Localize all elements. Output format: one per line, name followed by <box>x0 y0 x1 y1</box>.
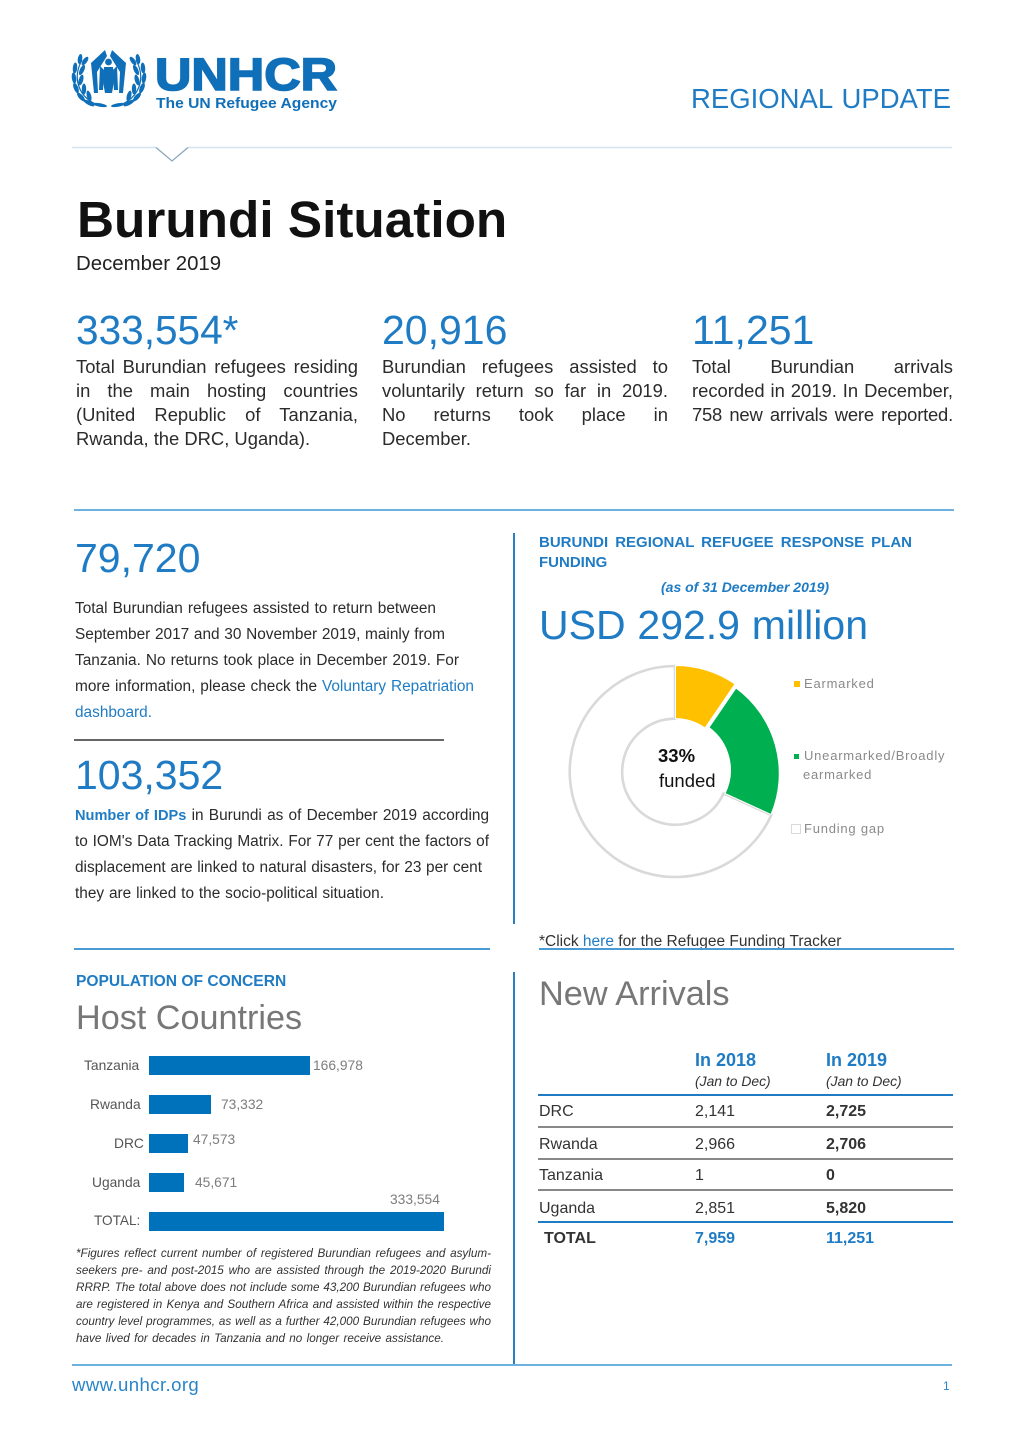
arrivals table: (Jan to Dec) <box>826 1073 902 1089</box>
arrivals table: Rwanda <box>539 1136 598 1153</box>
footnote: country level programmes, as well as a further 42,000 Burundian refugees who <box>76 1315 491 1328</box>
bar chart: host countries: 73,332 <box>221 1097 263 1112</box>
funding gap segment <box>570 666 771 877</box>
description: Total Burundian refugees residing <box>76 356 358 377</box>
footnote: have lived for decades in Tanzania and no longer receive assistance. <box>76 1332 444 1345</box>
number: 103,352 <box>75 752 223 798</box>
description: Total Burundian refugees assisted to return between <box>75 600 436 617</box>
bar chart: host countries: 166,978 <box>313 1058 363 1073</box>
donut center label: 33% <box>658 745 695 766</box>
footnote: are registered in Kenya and Southern Africa and assisted within the respective <box>76 1298 491 1311</box>
legend: earmarked: Earmarked <box>804 676 875 691</box>
footnote: *Figures reflect current number of registered Burundian refugees and asylum- <box>76 1247 491 1260</box>
icon: laurel and sheltering hands emblem <box>71 50 147 108</box>
date: December 2019 <box>76 253 221 275</box>
unearmarked segment <box>709 688 779 814</box>
bar chart: host countries: 45,671 <box>195 1175 237 1190</box>
legend: unearmarked: earmarked <box>803 767 872 782</box>
description: displacement are linked to natural disasters, for 23 per cent <box>75 859 482 876</box>
description: (United Republic of Tanzania, <box>76 404 358 425</box>
legend: funding gap: Funding gap <box>804 821 885 836</box>
page number: 1 <box>943 1379 950 1393</box>
arrivals table: 7,959 <box>695 1230 735 1247</box>
description: more information, please check the Voluntary Repatriation <box>75 678 474 695</box>
bar chart: host countries: Rwanda <box>90 1097 141 1112</box>
description: dashboard. <box>75 704 152 721</box>
description: Tanzania. No returns took place in December 2019. For <box>75 652 459 669</box>
arrivals table: 0 <box>826 1167 835 1184</box>
section label: POPULATION OF CONCERN <box>76 973 286 990</box>
bar chart: host countries: Uganda <box>92 1175 140 1190</box>
number: 11,251 <box>692 307 814 353</box>
footnote: seekers pre- and post-2015 who are assisted through the 2019-2020 Burundi <box>76 1264 491 1277</box>
stat: returns <box>382 307 668 449</box>
section heading: Host Countries <box>76 999 302 1037</box>
arrivals table: 2,725 <box>826 1103 866 1120</box>
header label: regional update: REGIONAL UPDATE <box>691 83 951 114</box>
description: 758 new arrivals were reported. <box>692 404 953 425</box>
funding tracker note: *Click here for the Refugee Funding Tracker <box>539 932 841 950</box>
arrivals table: 2,706 <box>826 1136 866 1153</box>
logo wordmark: The UN Refugee Agency <box>156 95 338 112</box>
bar chart: host countries <box>84 1056 444 1231</box>
panel: IDPs <box>75 752 490 902</box>
funding heading: FUNDING <box>539 554 607 571</box>
logo wordmark: UNHCR <box>155 49 337 100</box>
description: No returns took place in <box>382 404 668 425</box>
footnote: RRRP. The total above does not include some 43,200 Burundian refugees who <box>76 1281 491 1294</box>
description <box>382 356 668 449</box>
funding heading: BURUNDI REGIONAL REFUGEE RESPONSE PLAN <box>539 534 912 551</box>
donut chart <box>568 664 779 878</box>
arrivals table: In 2019 <box>826 1050 887 1070</box>
description: recorded in 2019. In December, <box>692 380 953 401</box>
description: to IOM's Data Tracking Matrix. For 77 per cent the factors of <box>75 833 489 850</box>
as-of date: (as of 31 December 2019) <box>661 579 829 595</box>
description: in the main hosting countries <box>76 380 358 401</box>
arrivals table: 2,141 <box>695 1103 735 1120</box>
description <box>692 356 953 425</box>
legend: unearmarked <box>794 748 945 782</box>
number: 20,916 <box>382 307 507 353</box>
arrivals table: 1 <box>695 1167 704 1184</box>
panel: assisted returns <box>75 535 474 721</box>
arrivals table: (Jan to Dec) <box>695 1073 771 1089</box>
description: December. <box>382 428 471 449</box>
stat: arrivals <box>692 307 953 425</box>
panel: population of concern <box>76 973 302 1037</box>
description: they are linked to the socio-political situation. <box>75 885 384 902</box>
arrivals table: Tanzania <box>539 1167 603 1184</box>
description: Total Burundian arrivals <box>692 356 953 377</box>
description <box>76 356 358 449</box>
funding heading <box>539 534 912 571</box>
arrivals table: 11,251 <box>826 1230 874 1247</box>
funding total: USD 292.9 million <box>539 602 868 648</box>
arrivals table: In 2018 <box>695 1050 756 1070</box>
donut center label: funded <box>659 770 716 791</box>
stat: total refugees <box>76 307 358 449</box>
section heading: New Arrivals <box>539 975 730 1013</box>
panel: funding <box>539 534 945 950</box>
arrivals table: TOTAL <box>544 1230 596 1247</box>
description: Rwanda, the DRC, Uganda). <box>76 428 310 449</box>
arrivals table: 5,820 <box>826 1200 866 1217</box>
arrivals table: DRC <box>539 1103 574 1120</box>
number: 79,720 <box>75 535 200 581</box>
title: Burundi Situation <box>77 191 507 248</box>
arrivals table: 2,851 <box>695 1200 735 1217</box>
bar chart: host countries: 333,554 <box>390 1192 440 1207</box>
panel: new arrivals <box>538 975 953 1247</box>
bar chart: host countries: Tanzania <box>84 1058 139 1073</box>
description: September 2017 and 30 November 2019, mainly from <box>75 626 445 643</box>
arrivals table: Uganda <box>539 1200 595 1217</box>
earmarked segment <box>676 666 735 728</box>
arrivals table <box>538 1050 953 1247</box>
donut center label <box>658 745 716 791</box>
description: Number of IDPs in Burundi as of December 2019 according <box>75 807 489 824</box>
header rule with chevron <box>72 146 952 162</box>
legend: unearmarked: Unearmarked/Broadly <box>804 748 945 763</box>
bar chart: host countries: 47,573 <box>193 1132 235 1147</box>
number: 333,554* <box>76 307 238 353</box>
header: UNHCR logo <box>72 49 338 112</box>
description <box>75 807 490 902</box>
bar chart: host countries: DRC <box>114 1136 144 1151</box>
footnote <box>76 1247 492 1345</box>
footer link: www.unhcr.org <box>72 1374 199 1395</box>
description <box>75 600 474 721</box>
description: voluntarily return so far in 2019. <box>382 380 668 401</box>
bar chart: host countries: TOTAL: <box>94 1213 140 1228</box>
description: Burundian refugees assisted to <box>382 356 668 377</box>
arrivals table: 2,966 <box>695 1136 735 1153</box>
